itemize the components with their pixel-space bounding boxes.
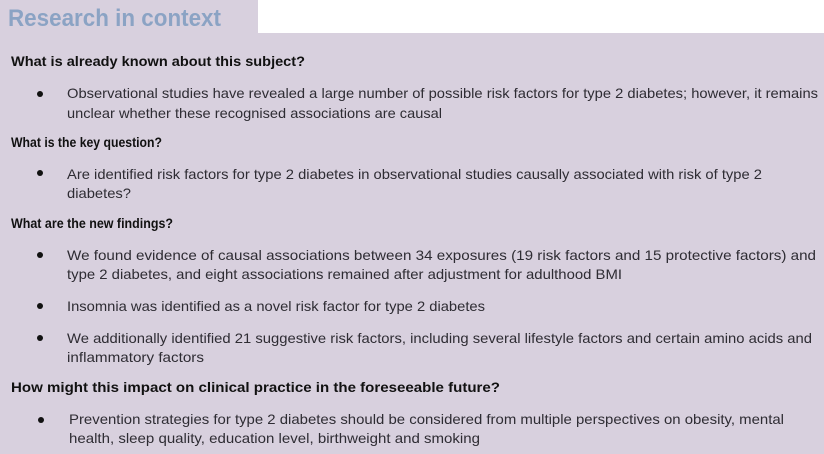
bullet point: causal associations: We found evidence of causal associations between 34 exposures (19 risk factors and 15 protective factors) and: [67, 247, 816, 263]
section: what is already known: [11, 54, 818, 121]
title: Research in context: [8, 5, 221, 32]
bullet point: observational studies: unclear whether these recognised associations are causal: [67, 105, 442, 121]
bullet point: prevention strategies: Prevention strategies for type 2 diabetes should be considered from multiple perspectives on obesity, mental: [69, 411, 784, 427]
bullet point: suggestive risk factors: [37, 330, 812, 365]
bullet point: suggestive risk factors: We additionally identified 21 suggestive risk factors, including several lifestyle factors and certain amino acids and: [67, 330, 812, 346]
bullet point: insomnia: Insomnia was identified as a novel risk factor for type 2 diabetes: [67, 298, 485, 314]
heading: key question: What is the key question?: [11, 135, 162, 150]
bullet point: causal associations: [37, 247, 816, 282]
heading: new findings: What are the new findings?: [11, 216, 173, 231]
section: key question: [11, 135, 762, 201]
bullet point: prevention strategies: [38, 411, 784, 446]
bullet point: prevention strategies: health, sleep quality, education level, birthweight and smoking: [69, 430, 480, 446]
section: clinical practice: [11, 380, 784, 446]
section: new findings: [11, 216, 816, 365]
bullet point: causal associations: type 2 diabetes, and eight associations remained after adjustment for adulthood BMI: [67, 266, 622, 282]
bullet point: suggestive risk factors: inflammatory factors: [67, 349, 204, 365]
heading: clinical practice: How might this impact on clinical practice in the foreseeable future?: [11, 380, 500, 395]
heading: already known: What is already known about this subject?: [11, 54, 305, 69]
bullet point: observational studies: [37, 85, 818, 121]
bullet point: observational studies: Observational studies have revealed a large number of possible risk factors for type 2 diabetes; however, it remains: [67, 85, 818, 101]
bullet point: identified risk factors: [37, 166, 762, 201]
bullet point: identified risk factors: diabetes?: [67, 185, 131, 201]
bullet point: identified risk factors: Are identified risk factors for type 2 diabetes in observational studies causally associated with risk of type 2: [67, 166, 762, 182]
